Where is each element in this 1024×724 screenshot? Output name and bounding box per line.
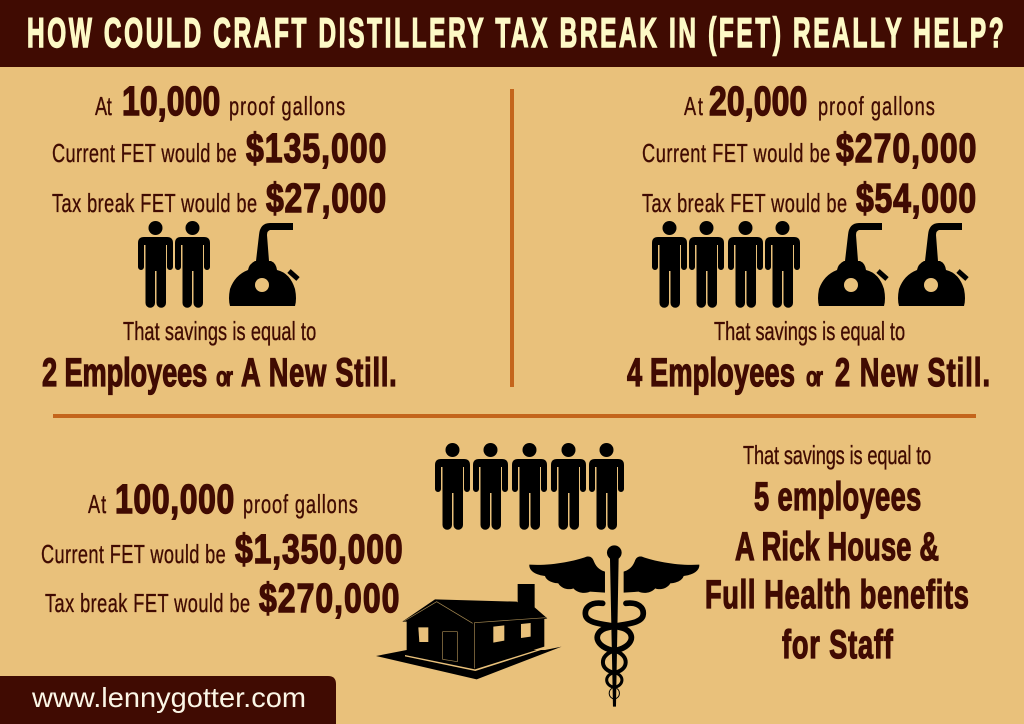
text: tax break FET: Tax break FET would be xyxy=(52,189,257,218)
text: gallons line: 20,000 xyxy=(709,78,807,124)
text: gallons line: proof gallons xyxy=(243,490,358,519)
panel: 20,000 proof gallons xyxy=(627,78,990,395)
vertical divider xyxy=(510,89,514,387)
icon: still xyxy=(229,223,298,306)
text: gallons line xyxy=(684,78,935,124)
text: gallons line: At xyxy=(684,92,704,121)
text: tax break FET: $270,000 xyxy=(259,575,399,621)
text: current FET: Current FET would be xyxy=(642,139,830,168)
text: savings intro: That savings is equal to xyxy=(123,317,316,346)
text: gallons line: At xyxy=(95,92,112,121)
text: gallons line: proof gallons xyxy=(229,92,345,121)
text: savings intro: That savings is equal to xyxy=(714,317,905,346)
text: current FET: $135,000 xyxy=(246,125,386,171)
text: savings result: A Rick House & xyxy=(735,525,939,569)
icons: 2 employees xyxy=(138,221,210,308)
title: HOW COULD CRAFT DISTILLERY TAX BREAK IN (FET) REALLY HELP? xyxy=(27,10,1004,57)
panel: 100,000 proof gallons xyxy=(41,441,969,707)
text: current FET: Current FET would be xyxy=(41,540,226,569)
text: gallons line xyxy=(88,476,358,522)
text: savings result: for Staff xyxy=(782,623,893,667)
text: savings result xyxy=(705,475,969,667)
icon: caduceus xyxy=(529,545,699,707)
text: current FET xyxy=(642,125,976,171)
icon: rick house xyxy=(376,584,562,679)
text: current FET xyxy=(41,526,403,572)
text: savings result: 4 Employees xyxy=(627,351,795,395)
text: tax break FET: $54,000 xyxy=(856,175,976,221)
text: gallons line: At xyxy=(88,490,107,519)
text: gallons line: proof gallons xyxy=(818,92,935,121)
text: tax break FET: Tax break FET would be xyxy=(642,189,847,218)
text: savings result: Full Health benefits xyxy=(705,573,969,617)
text: savings result: or xyxy=(806,361,823,393)
panel: 10,000 proof gallons xyxy=(42,78,397,395)
icons: 2 stills xyxy=(818,223,967,306)
text: tax break FET: $27,000 xyxy=(266,175,386,221)
text: savings intro: That savings is equal to xyxy=(743,441,931,470)
text: gallons line: 100,000 xyxy=(115,476,234,522)
text: savings result: A New Still. xyxy=(241,351,397,395)
text: savings result xyxy=(42,351,397,395)
footer tab xyxy=(0,676,336,724)
text: gallons line: 10,000 xyxy=(122,78,220,124)
text: current FET xyxy=(52,125,386,171)
text: current FET: Current FET would be xyxy=(52,139,237,168)
text: savings result: 2 Employees xyxy=(42,351,207,395)
icons: 5 employees xyxy=(435,443,624,530)
text: savings result: 5 employees xyxy=(754,475,921,519)
text: savings result xyxy=(627,351,990,395)
text: current FET: $270,000 xyxy=(836,125,976,171)
text: tax break FET xyxy=(642,175,976,221)
text: gallons line xyxy=(95,78,345,124)
text: tax break FET xyxy=(45,575,399,621)
text: tax break FET: Tax break FET would be xyxy=(45,589,250,618)
text: current FET: $1,350,000 xyxy=(235,526,403,572)
header band xyxy=(0,0,1024,67)
website url: www.lennygotter.com xyxy=(31,682,306,713)
icons: 4 employees xyxy=(652,221,800,308)
horizontal divider xyxy=(53,414,976,418)
text: savings result: 2 New Still. xyxy=(835,351,990,395)
text: savings result: or xyxy=(216,361,233,393)
text: tax break FET xyxy=(52,175,386,221)
